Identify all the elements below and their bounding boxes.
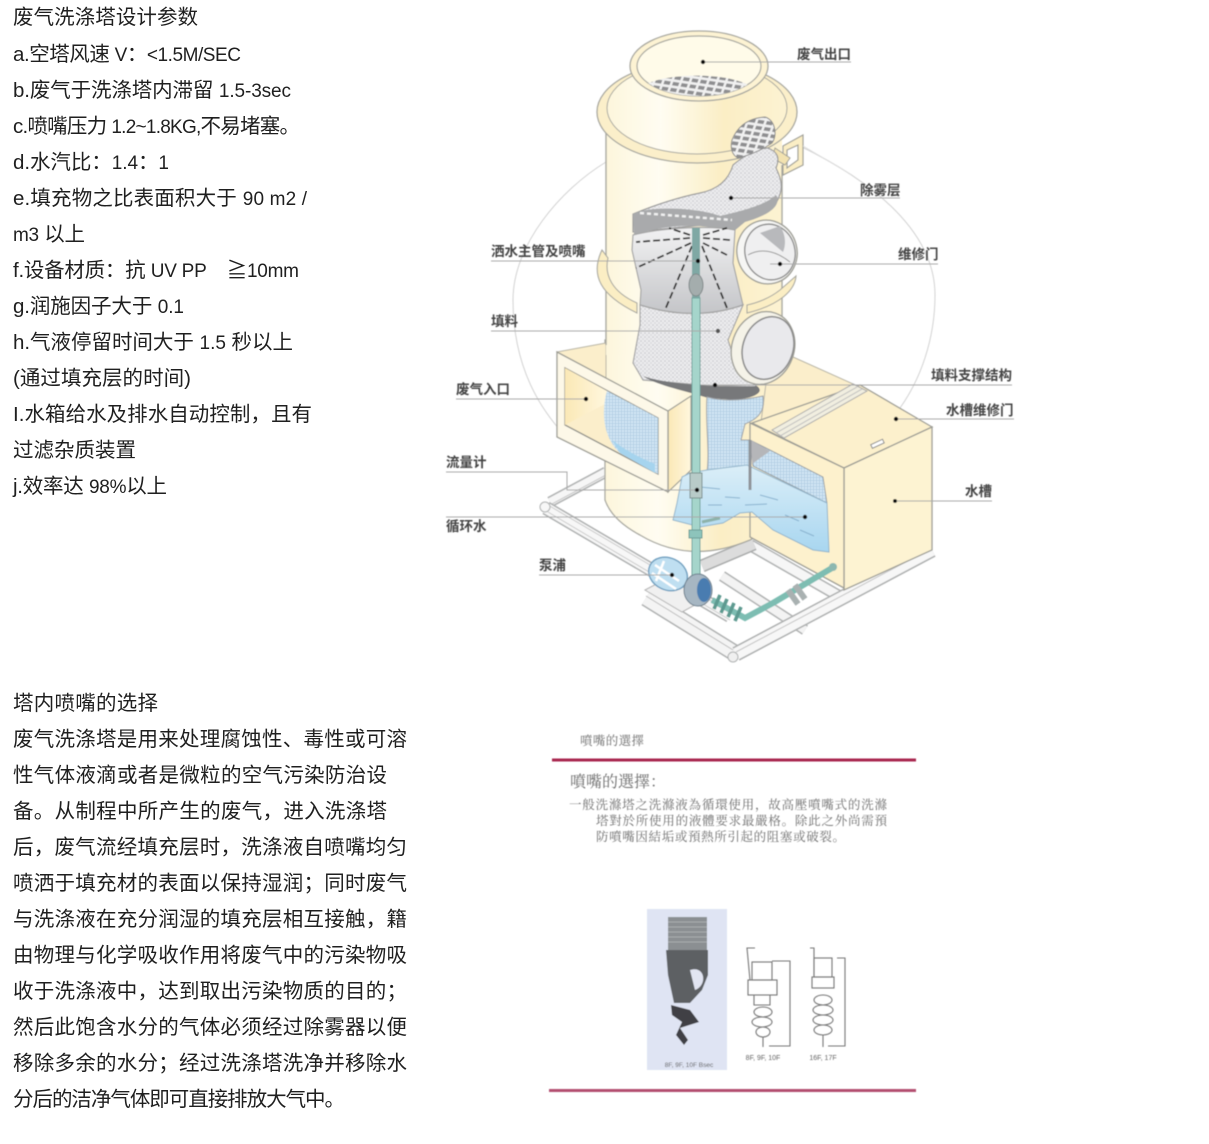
side box — [783, 135, 803, 175]
packing section — [633, 305, 757, 387]
packing support — [643, 376, 760, 400]
text block: nozzle selection description: 移除多余的水分；经过洗涤塔洗净并移除水 — [13, 1052, 407, 1075]
tank internal packing — [750, 440, 827, 503]
panel heading: 噴嘴的選擇： — [570, 773, 666, 791]
manhole upper — [730, 213, 804, 291]
text block: nozzle selection description: 废气洗涤塔是用来处理腐蚀性、毒性或可溶 — [13, 728, 407, 751]
text block: nozzle selection description: 然后此饱含水分的气体必须经过除雾器以便 — [13, 1016, 407, 1039]
riser pipe — [689, 228, 720, 598]
panel paragraph: 一般洗滌塔之洗滌液為循環使用，故高壓噴嘴式的洗滌 — [569, 797, 887, 812]
nozzle line drawing: 8F 9F 10F — [746, 948, 790, 1062]
pump — [643, 551, 712, 606]
tower top ring with grid — [630, 31, 768, 101]
text block: design parameters list: m3 以上 — [13, 223, 85, 246]
nozzle photo: 8F, 9F, 10F Bsec — [665, 1062, 714, 1069]
nozzle line drawing: 16F 17F — [809, 948, 845, 1062]
panel paragraph: 防噴嘴因結垢或預熱所引起的阻塞或破裂。 — [596, 829, 845, 844]
demister layer — [633, 148, 781, 232]
text block: design parameters list: b.废气于洗涤塔内滞留 1.5-3sec — [13, 79, 291, 102]
tower upper body — [606, 130, 782, 355]
text block: nozzle selection description: 收于洗涤液中，达到取出污染物质的目的； — [13, 980, 407, 1003]
circulating water — [673, 465, 829, 552]
long left rail — [546, 508, 730, 616]
text block: nozzle selection description — [13, 728, 407, 1111]
diagram labels: 泵浦 — [539, 557, 566, 573]
text block: nozzle selection description: 喷洒于填充材的表面以保持湿润；同时废气 — [13, 872, 407, 895]
water tank — [750, 384, 932, 590]
nozzle line drawing: 8F 9F 10F: 8F, 9F, 10F — [746, 1055, 780, 1062]
text block: design parameters list: I.水箱给水及排水自动控制，且有 — [13, 403, 312, 426]
text block: nozzle selection description: 与洗涤液在充分润湿的填充层相互接触，籍 — [13, 908, 407, 931]
text block: design parameters list — [12, 43, 312, 498]
diagram labels: 流量计 — [446, 454, 487, 470]
spray chamber — [632, 228, 743, 314]
text block: design parameters list: a.空塔风速 V：<1.5M/SEC — [13, 43, 241, 66]
text block: nozzle selection description: 后，废气流经填充层时，洗涤液自喷嘴均匀 — [13, 836, 407, 859]
heading: design parameters: 废气洗涤塔设计参数 — [13, 6, 198, 29]
right inner beam — [750, 545, 846, 600]
tank top extension behind tower — [557, 343, 862, 430]
nozzle photo — [647, 909, 727, 1070]
top rule — [552, 758, 916, 762]
tower top flange — [597, 61, 797, 163]
heading: nozzle selection: 塔内喷嘴的选择 — [13, 692, 158, 715]
text block: nozzle selection description: 备。从制程中所产生的废气，进入洗涤塔 — [13, 800, 387, 823]
text block: design parameters list: g.润施因子大于 0.1 — [13, 295, 184, 318]
text block: design parameters list: c.喷嘴压力 1.2~1.8KG,不易堵塞。 — [13, 115, 300, 138]
bottom rule — [549, 1089, 916, 1092]
text block: design parameters list: j.效率达 98%以上 — [12, 475, 167, 498]
diagram labels: 填料 — [491, 313, 518, 329]
manhole lower — [721, 303, 805, 393]
demister lump — [731, 117, 775, 158]
panel title: 噴嘴的選擇 — [580, 733, 644, 748]
demister band — [633, 195, 778, 236]
tower lower body — [605, 340, 782, 551]
blue packing below tower — [707, 396, 763, 472]
panel: nozzle selection scan — [549, 733, 916, 1092]
diagram labels: 填料支撑结构 — [931, 367, 1012, 383]
diagram labels: 循环水 — [446, 518, 487, 534]
outlet piping — [712, 563, 837, 621]
nozzle line drawing: 16F 17F: 16F, 17F — [809, 1055, 837, 1062]
text block: design parameters list: h.气液停留时间大于 1.5 秒以上 — [13, 331, 293, 354]
text block: nozzle selection description: 分后的洁净气体即可直接排放大气中。 — [13, 1088, 345, 1111]
skid frame — [540, 472, 932, 662]
diagram labels: 维修门 — [898, 246, 938, 262]
text block: nozzle selection description: 性气体液滴或者是微粒的空气污染防治设 — [13, 764, 387, 787]
text block: design parameters list: e.填充物之比表面积大于 90 m2 / — [13, 187, 308, 210]
pump platform rail — [646, 598, 733, 652]
back rail — [550, 472, 606, 502]
middle beam — [702, 544, 754, 566]
text block: design parameters list: d.水汽比：1.4：1 — [13, 151, 169, 174]
diagram: scrubber tower cutaway — [446, 31, 1014, 662]
front right rail — [736, 550, 932, 654]
surrounding circle — [513, 146, 935, 430]
diagram labels: 废气出口 — [797, 46, 851, 62]
diagram labels: 水槽 — [965, 483, 992, 499]
spray dashes — [636, 228, 730, 310]
text block: design parameters list: 过滤杂质装置 — [13, 439, 136, 462]
diagram labels — [446, 46, 1014, 573]
cross beam — [722, 576, 805, 630]
diagram labels: 废气入口 — [456, 381, 510, 397]
diagram labels: 水槽维修门 — [946, 402, 1014, 418]
text block: design parameters list: (通过填充层的时间) — [13, 367, 191, 390]
diagram labels: 除雾层 — [860, 182, 900, 198]
leader dots — [584, 60, 898, 577]
text block: nozzle selection description: 由物理与化学吸收作用将废气中的污染物吸 — [13, 944, 407, 967]
tower mid flange — [597, 250, 796, 313]
waste gas inlet duct — [557, 352, 691, 492]
text block: design parameters list: f.设备材质：抗 UV PP ≧10mm — [13, 259, 299, 282]
panel paragraph: 塔對於所使用的液體要求最嚴格。除此之外尚需預 — [596, 813, 887, 828]
diagram labels: 洒水主管及喷嘴 — [491, 243, 586, 259]
leader lines — [446, 62, 1014, 575]
panel paragraph — [569, 797, 887, 844]
